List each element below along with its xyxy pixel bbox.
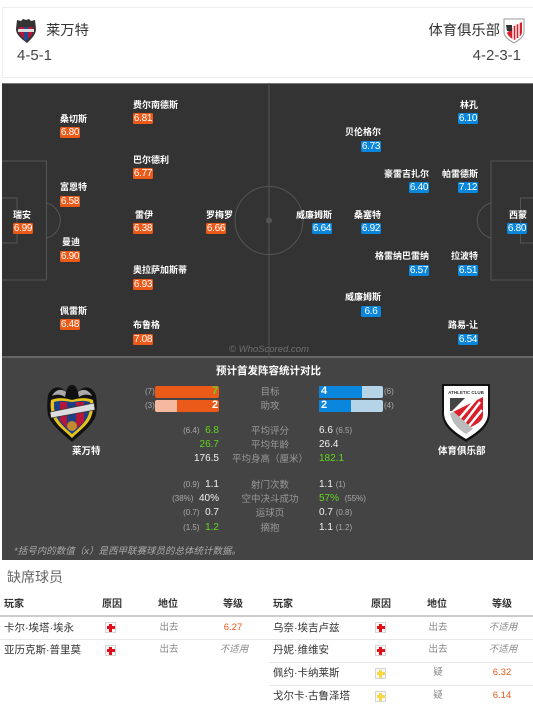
status: 出去 [428,644,448,655]
label: dribbles: 运球页 [256,508,284,519]
status: 疑 [433,667,443,678]
aerial right: 57% (55%) [319,493,366,504]
player: 威廉姆斯 (前腰) [296,210,332,234]
player: 布鲁格 [133,320,160,345]
value: Athletic assists: 2 [321,399,327,411]
col: 玩家: 玩家 [4,599,24,610]
status: 出去 [428,622,448,633]
player: 格雷纳巴雷纳: 格雷纳巴雷纳 [375,251,429,261]
player: 豪雷吉扎尔 [384,169,429,193]
player: 桑塞特: 6.92 [362,223,380,234]
average rating right: 6.6 (6.5) [319,425,352,436]
player: 威廉姆斯 (前腰): 威廉姆斯 [296,210,332,220]
reference: Athletic assists: (4) [384,401,394,410]
panel: pitch [2,83,533,358]
player: 贝伦格尔 [345,127,381,152]
tackles right: 1.1 (1.2) [319,522,352,533]
player: 路易-让 [448,320,478,345]
shots right: 1.1 (1) [319,479,345,490]
player: 威廉姆斯 (前锋): 6.6 [364,306,378,317]
watermark: © WhoScored.com [229,344,309,355]
average height left: 176.5 [194,453,219,464]
average age right: 26.4 [319,439,338,450]
value: Levante assists: 2 [212,399,218,411]
label: average height: 平均身高（厘米） [232,454,308,465]
player: 拉波特: 拉波特 [451,251,478,261]
player: 林孔: 6.10 [459,113,477,124]
rating: 不适用 [489,622,517,633]
table rules: left missing players [0,615,269,640]
player: 曼迪: 曼迪 [62,237,80,247]
row name: 佩约·卡纳莱斯 [273,667,340,679]
icon: Athletic crest small [504,18,524,44]
label: average rating: 平均评分 [251,426,289,437]
status: 出去 [159,644,178,655]
player: 佩雷斯: 6.48 [61,319,79,330]
col: 地位: 地位 [427,599,447,610]
reference: Athletic goals: (6) [384,387,394,396]
player: 巴尔德利: 巴尔德利 [133,155,169,165]
player: 格雷纳巴雷纳 [375,251,429,276]
heading: missing players: 缺席球员 [7,569,63,585]
col: 等级: 等级 [223,599,243,610]
icon: Levante crest small [16,19,36,43]
player: 帕雷德斯: 帕雷德斯 [442,169,478,179]
player: 桑切斯 [60,114,87,138]
player: 雷伊 [133,210,153,234]
player: 曼迪: 6.90 [61,251,79,262]
player: 威廉姆斯 (前腰): 6.64 [313,223,331,234]
team label: Athletic: 体育俱乐部 [438,446,486,457]
player: 拉波特 [451,250,478,276]
player: 贝伦格尔: 6.73 [362,141,380,152]
player: 桑塞特: 桑塞特 [354,210,381,220]
player: 桑切斯: 桑切斯 [60,114,87,124]
player: 路易-让: 6.54 [459,334,477,345]
player: 林孔: 林孔 [460,100,478,110]
bar: Levante goals [155,386,219,398]
shots left: (0.9) 1.1 [183,479,219,490]
panel: lineup stats comparison [2,358,533,560]
value: Levante goals: 7 [212,385,218,397]
player: 林孔 [458,100,478,124]
rating: 不适用 [220,644,248,655]
player: 费尔南德斯: 6.81 [134,113,152,124]
status: 出去 [159,622,178,633]
bar: Athletic assists [319,400,383,412]
icon: injury [375,622,386,633]
bar: Athletic goals [319,386,383,398]
label: shots: 射门次数 [251,480,289,491]
aerial left: (38%) 40% [172,493,219,504]
average age left: 26.7 [200,439,219,450]
player: 拉波特: 6.51 [459,265,477,276]
row name: 丹妮·维维安 [273,644,329,656]
crest: Levante [47,385,97,442]
col: 等级: 等级 [492,599,512,610]
label: tackles: 摘抱 [260,523,280,534]
player: 西蒙: 西蒙 [509,210,527,220]
col: 原因: 原因 [102,599,122,610]
icon: injury [105,622,116,633]
player: 帕雷德斯: 7.12 [459,182,477,193]
player: 瑞安 [13,210,33,234]
row name: 戈尔卡·古鲁泽塔 [273,690,350,702]
value: Athletic goals: 4 [321,385,327,397]
player: 威廉姆斯 (前锋) [345,292,381,317]
player: 瑞安: 瑞安 [13,210,31,220]
row name: 亚历克斯·普里莫 [4,644,81,656]
player: 罗梅罗: 6.66 [207,223,225,234]
panel title: 预计首发阵容统计对比 [216,365,321,377]
rating: 6.14 [493,690,511,701]
stat row: assists [145,400,383,412]
player: 雷伊: 6.38 [134,223,152,234]
player: 雷伊: 雷伊 [135,210,153,220]
player: 奥拉萨加斯蒂 [133,264,187,290]
rating: 6.27 [224,622,242,633]
col: 原因: 原因 [371,599,391,610]
player: 豪雷吉扎尔: 6.40 [410,182,428,193]
player: 西蒙: 6.80 [508,223,526,234]
stat row: goals [145,386,383,398]
player: 巴尔德利: 6.77 [134,168,152,179]
row name: 卡尔·埃塔·埃永 [4,622,74,634]
player: 威廉姆斯 (前锋): 威廉姆斯 [345,292,381,302]
header: match teams and formations [2,7,533,78]
dribbles left: (0.7) 0.7 [183,507,219,518]
crest: Athletic Club: ATHLETIC CLUB [448,390,485,395]
player: 罗梅罗 [206,210,233,234]
player: 布鲁格: 布鲁格 [133,320,160,330]
player: 路易-让: 路易-让 [448,320,478,330]
player: 富恩特: 6.58 [61,196,79,207]
footnote: *括号内的数值（x）是西甲联赛球员的总体统计数据。 [14,546,241,557]
team label: Levante: 莱万特 [72,446,101,457]
player: 西蒙 [507,210,527,234]
tackles left: (1.5) 1.2 [183,522,219,533]
player: 桑塞特 [354,210,381,234]
label: goals: 目标 [260,387,280,398]
player: 帕雷德斯 [442,169,478,193]
average rating left: (6.4) 6.8 [183,425,219,436]
icon: injury [375,645,386,656]
player: 奥拉萨加斯蒂: 6.93 [134,279,152,290]
average height right: 182.1 [319,453,344,464]
icon: doubtful [375,668,386,679]
formation: Athletic: 4-2-3-1 [473,47,521,64]
label: average age: 平均年龄 [251,440,289,451]
player: 费尔南德斯 [133,100,178,124]
player: 桑切斯: 6.80 [61,127,79,138]
player: 曼迪 [60,237,80,262]
formation: Levante: 4-5-1 [17,47,52,64]
player: 罗梅罗: 罗梅罗 [206,210,233,220]
team name: Athletic: 体育俱乐部 [429,23,500,39]
rating: 不适用 [489,644,517,655]
player: 佩雷斯 [60,306,87,330]
player: 奥拉萨加斯蒂: 奥拉萨加斯蒂 [133,265,187,275]
label: aerial: 空中决斗成功 [241,494,298,505]
player: 富恩特: 富恩特 [60,182,87,192]
label: assists: 助攻 [260,401,280,412]
table rules: right missing players [265,590,533,717]
player: 豪雷吉扎尔: 豪雷吉扎尔 [384,169,429,179]
player: 布鲁格: 7.08 [134,334,152,345]
rating: 6.32 [493,667,511,678]
status: 疑 [433,690,443,701]
values: (7) [145,387,155,396]
dribbles right: 0.7 (0.8) [319,507,352,518]
icon: injury [105,645,116,656]
col: 地位: 地位 [158,599,178,610]
pitch markings [2,83,533,358]
player: 佩雷斯: 佩雷斯 [60,306,87,316]
col: 玩家: 玩家 [273,599,293,610]
values: (3) [145,401,155,410]
row name: 乌奈·埃吉卢兹 [273,622,340,634]
icon: doubtful [375,691,386,702]
team name: Levante: 莱万特 [46,23,89,39]
player: 贝伦格尔: 贝伦格尔 [345,127,381,137]
bar: Levante assists [155,400,219,412]
player: 格雷纳巴雷纳: 6.57 [410,265,428,276]
player: 瑞安: 6.99 [14,223,32,234]
player: 费尔南德斯: 费尔南德斯 [133,100,178,110]
player: 富恩特 [60,182,87,207]
player: 巴尔德利 [133,155,169,179]
crest: Athletic Club [442,384,490,442]
